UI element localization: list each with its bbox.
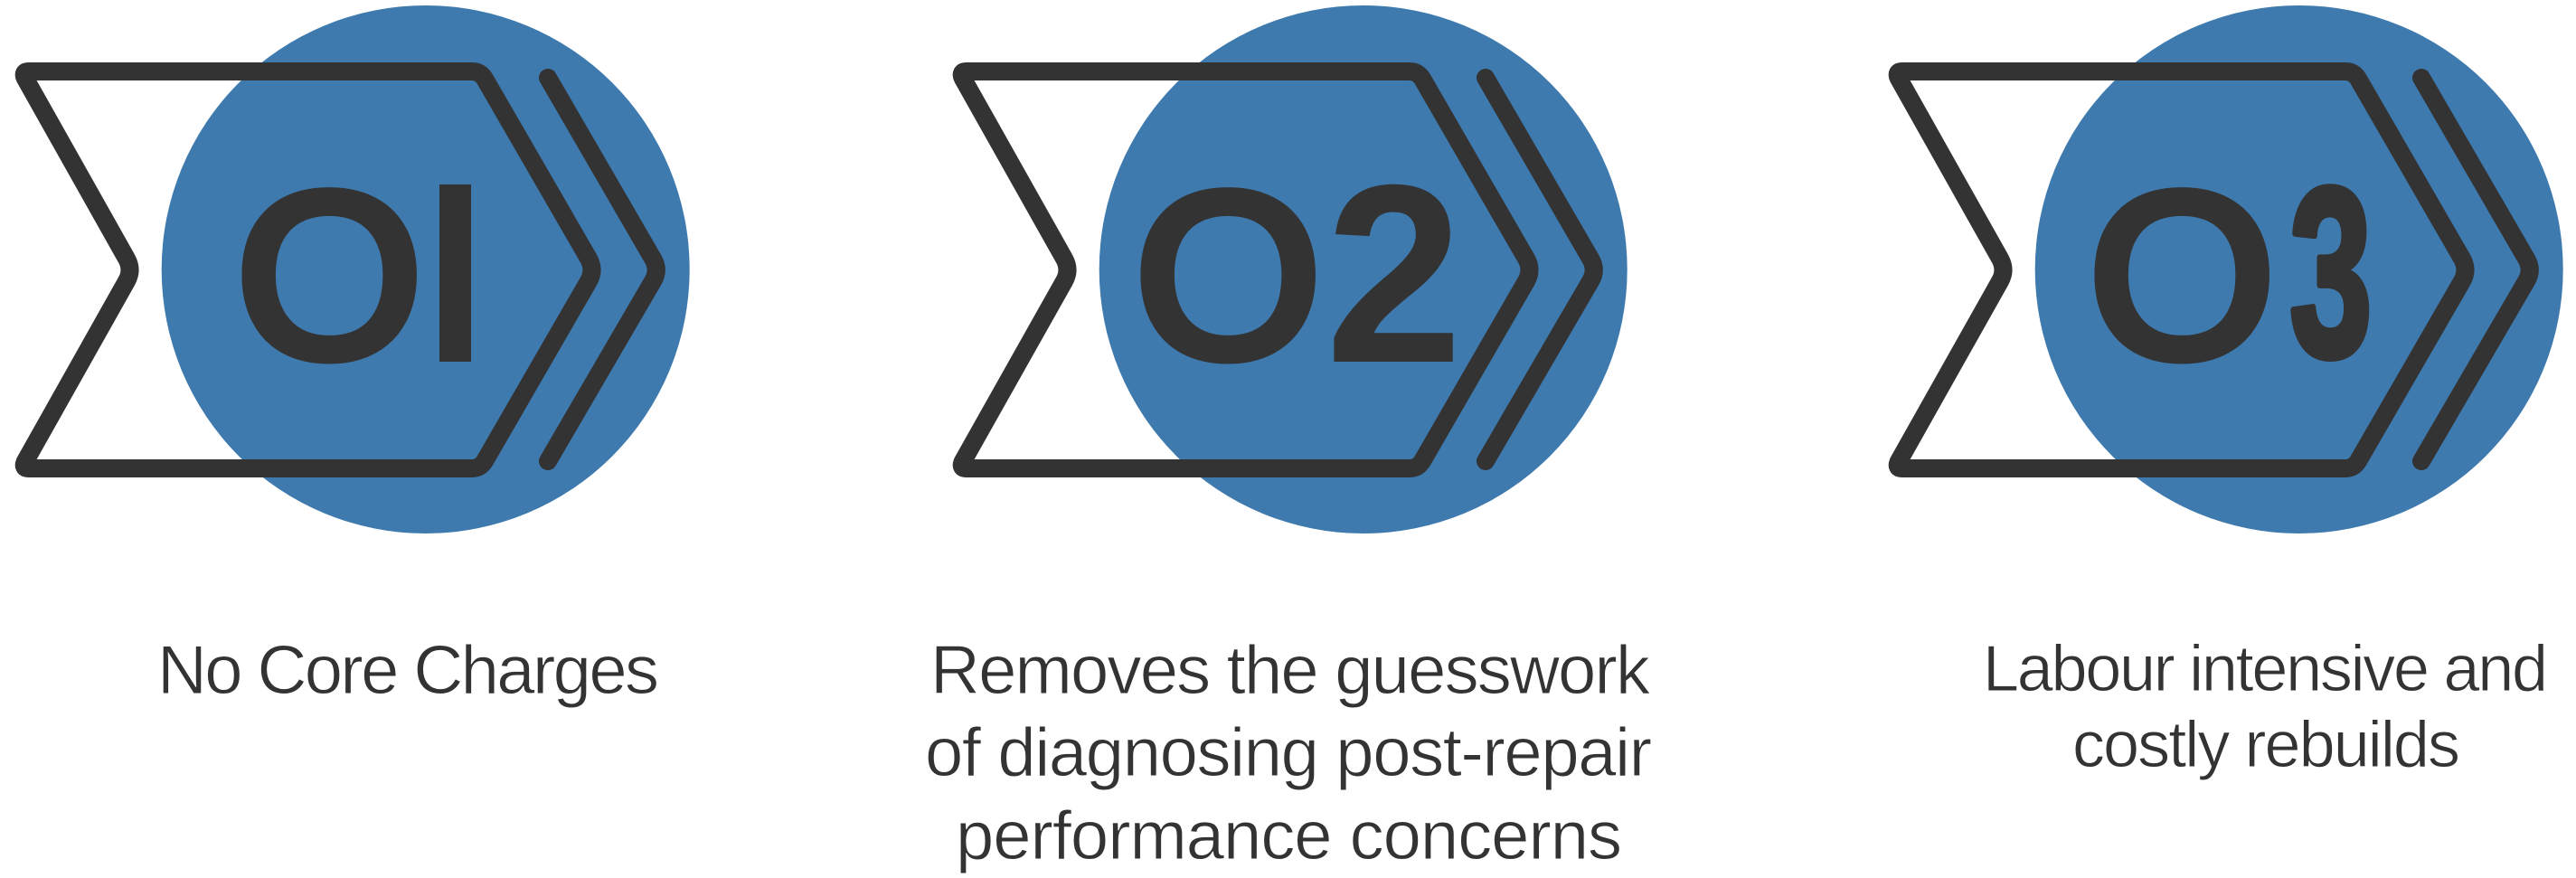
number 03	[2089, 138, 2373, 406]
banner arrow 02	[962, 71, 1530, 468]
circle: blue background 02	[1099, 5, 1628, 533]
label 03	[1983, 633, 2548, 781]
label 02	[925, 632, 1652, 874]
number 02	[1135, 131, 1463, 416]
chevron 02	[1486, 78, 1594, 461]
label 03: costly rebuilds	[2072, 709, 2460, 781]
number 01	[241, 184, 471, 363]
number 01: O	[236, 145, 423, 406]
number 02: O	[1135, 145, 1322, 406]
panel: item 03	[1898, 5, 2563, 781]
chevron 01	[548, 78, 656, 461]
number 03: O	[2089, 145, 2276, 406]
label 02: Removes the guesswork	[930, 632, 1651, 709]
number 02: 2	[1326, 131, 1463, 416]
label 03: Labour intensive and	[1983, 633, 2548, 705]
panel: item 02	[925, 5, 1652, 874]
number 03: 3	[2289, 138, 2373, 406]
label 01: No Core Charges	[157, 632, 659, 709]
banner arrow 01	[24, 71, 591, 468]
label 02: of diagnosing post-repair	[925, 714, 1652, 791]
circle: blue background 01	[162, 5, 690, 533]
banner arrow 03	[1898, 71, 2465, 468]
panel: item 01	[24, 5, 690, 709]
circle: blue background 03	[2035, 5, 2563, 533]
number 01: 1	[373, 120, 521, 419]
label 02: performance concerns	[956, 798, 1622, 874]
chevron 03	[2421, 78, 2530, 461]
